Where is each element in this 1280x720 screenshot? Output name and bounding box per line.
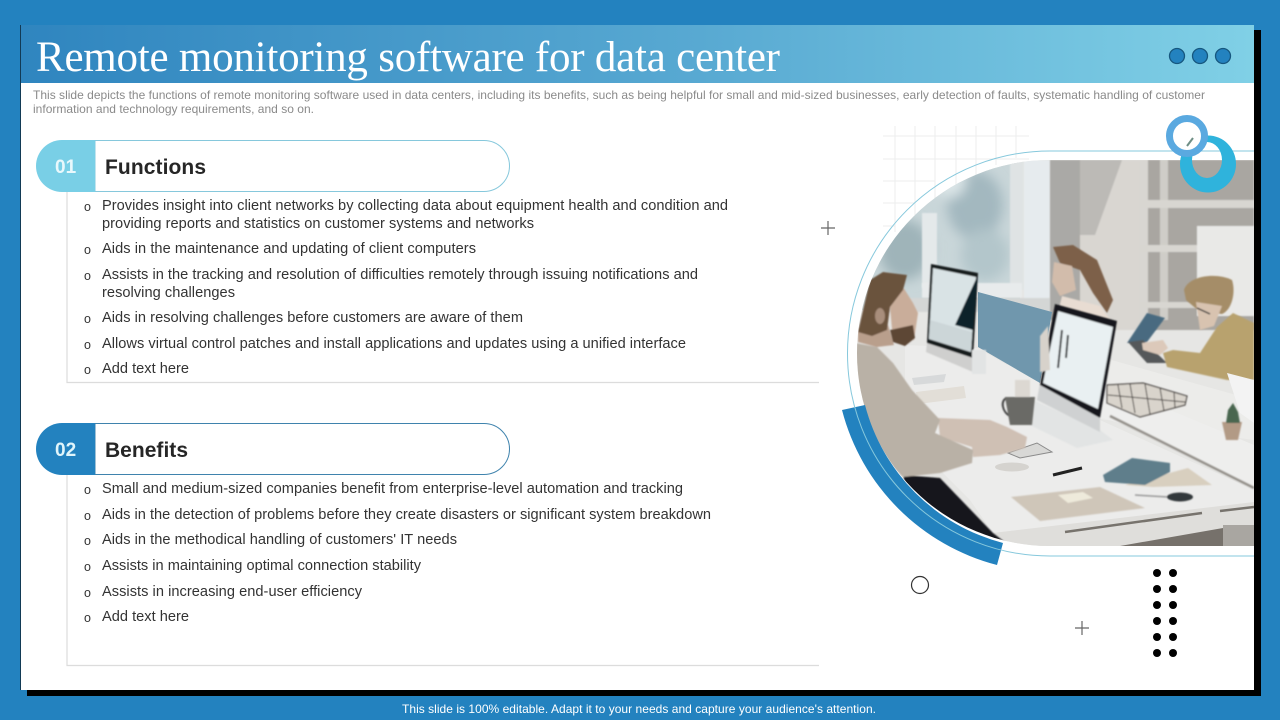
wire basket (1107, 383, 1187, 417)
description: This slide depicts the functions of remote monitoring software used in data centers, including its benefits, such as being helpful for small and mid-sized businesses, early detection of faults, systematic handling of customer (33, 88, 1205, 102)
benefits list: o (84, 611, 91, 625)
benefits list: o (84, 586, 91, 600)
functions list: o (84, 338, 91, 352)
benefits list: o (84, 509, 91, 523)
description (33, 88, 1205, 116)
icon: plus top (821, 221, 835, 235)
man (850, 272, 1027, 546)
functions list: Allows virtual control patches and install applications and updates using a unified interface (102, 336, 686, 352)
icon: hollow circle (912, 576, 928, 594)
benefits heading pill (36, 423, 510, 475)
mug (1003, 380, 1035, 425)
desk front edge (993, 502, 1254, 546)
benefits list: Assists in maintaining optimal connection stability (102, 558, 422, 574)
tablet and person right (1127, 276, 1254, 380)
woman (1052, 244, 1114, 318)
icon: rings (1170, 118, 1236, 192)
functions heading pill: 01 (55, 157, 77, 178)
benefits list: Small and medium-sized companies benefit from enterprise-level automation and tracking (102, 481, 683, 497)
functions list: Aids in the maintenance and updating of client computers (102, 241, 476, 257)
footer note: This slide is 100% editable. Adapt it to your needs and capture your audience's attention. (402, 702, 876, 716)
paper stack (916, 386, 966, 404)
main desk (905, 345, 1254, 533)
functions list: Aids in resolving challenges before customers are aware of them (102, 310, 523, 326)
right monitor (1030, 304, 1117, 448)
benefits heading pill: 02 (55, 440, 76, 461)
plant (1222, 403, 1242, 440)
functions list: o (84, 200, 91, 214)
photo: office workers at desks (850, 160, 1254, 546)
benefits list: Add text here (102, 609, 189, 625)
outline arc (848, 151, 1254, 556)
accent arc (842, 405, 1003, 565)
book and folder (1011, 458, 1212, 521)
title: Remote monitoring software for data center (36, 34, 780, 81)
functions list: o (84, 269, 91, 283)
left monitor (926, 264, 986, 374)
benefits heading pill: Benefits (105, 439, 188, 462)
description: information and technology requirements, and so on. (33, 102, 314, 116)
window dots (1170, 48, 1230, 64)
functions list: providing reports and statistics on customer systems and networks (102, 216, 534, 232)
walls and shelving (1050, 160, 1254, 330)
decorative grid (883, 126, 1029, 232)
functions list: Provides insight into client networks by collecting data about equipment health and condition and (102, 198, 728, 214)
icon: plus bottom (1075, 621, 1089, 635)
panel: benefits (36, 423, 819, 666)
functions list: Assists in the tracking and resolution of difficulties remotely through issuing notifications and (102, 267, 698, 283)
benefits list: o (84, 560, 91, 574)
functions heading pill: Functions (105, 156, 206, 179)
functions list (84, 198, 728, 377)
benefits list: o (84, 483, 91, 497)
benefits list: Assists in increasing end-user efficiency (102, 584, 363, 600)
back desk (960, 340, 1254, 440)
keyboard and mouse (1008, 443, 1052, 458)
functions list: o (84, 243, 91, 257)
functions list: resolving challenges (102, 285, 235, 301)
benefits list: Aids in the methodical handling of customers' IT needs (102, 532, 457, 548)
functions list: o (84, 312, 91, 326)
benefits list (84, 481, 711, 625)
header band (21, 25, 1254, 83)
benefits list: Aids in the detection of problems before they create disasters or significant system breakdown (102, 507, 711, 523)
blue partition (978, 292, 1052, 383)
icon: dot matrix (1153, 569, 1177, 657)
functions list: Add text here (102, 361, 189, 377)
laptop white right (1227, 373, 1254, 423)
functions heading pill (36, 140, 510, 192)
benefits list: o (84, 534, 91, 548)
panel: functions (36, 140, 819, 382)
functions list: o (84, 363, 91, 377)
window and trees (850, 160, 1050, 312)
